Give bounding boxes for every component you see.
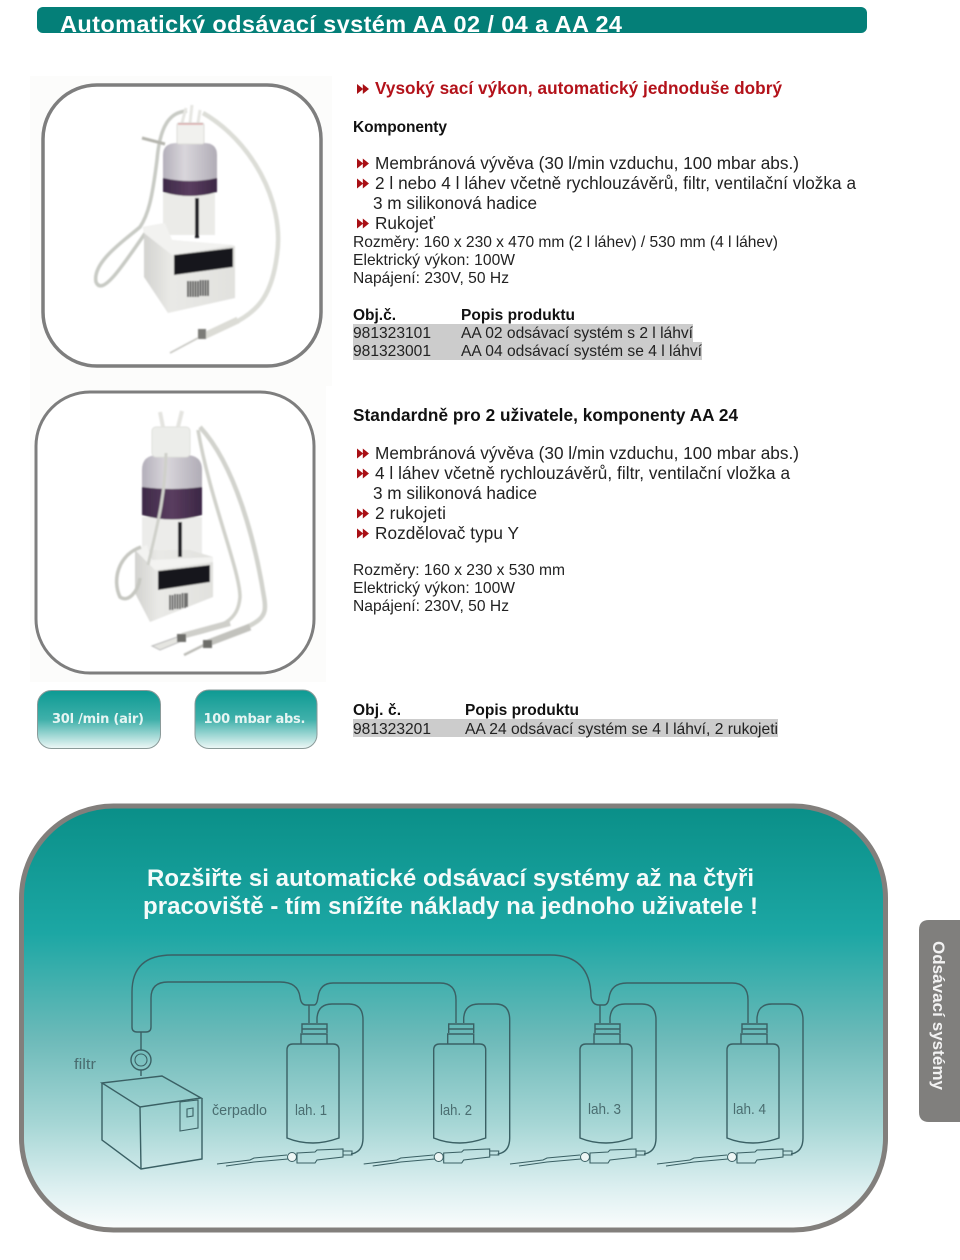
badge: 30 l/min <box>38 690 160 748</box>
order table AA 02/04: AA 04 odsávací systém se 4 l láhví <box>461 343 703 360</box>
component list: Rukojeť <box>375 213 436 233</box>
specifications AA 02/04: Elektrický výkon: 100W <box>353 252 515 269</box>
order table AA 02/04: Popis produktu <box>461 307 575 324</box>
heading: Komponenty: Komponenty <box>353 119 447 136</box>
title: Automatický odsávací systém AA 02 / 04 a AA 24 <box>60 11 622 37</box>
panel headline: Rozšiřte si automatické odsávací systémy až na čtyři <box>147 865 754 892</box>
specifications AA 24: Elektrický výkon: 100W <box>353 580 515 597</box>
specifications AA 24: Rozměry: 160 x 230 x 530 mm <box>353 562 565 579</box>
photo: AA 02/04 suction system <box>30 76 332 386</box>
panel headline <box>143 865 758 920</box>
icon: pump <box>102 1076 202 1169</box>
icon: filter <box>131 1050 151 1070</box>
badge: 30 l/min: 30l /min (air) <box>52 712 144 727</box>
component list AA 24: 2 rukojeti <box>375 503 446 523</box>
bottle 3 with handpiece <box>510 1004 656 1166</box>
component list AA 24: Membránová vývěva (30 l/min vzduchu, 100 mbar abs.) <box>375 443 799 463</box>
component list AA 24: Rozdělovač typu Y <box>375 523 520 543</box>
badge: 100 mbar <box>195 690 317 748</box>
component list AA 24: 3 m silikonová hadice <box>373 483 537 503</box>
label: pump: čerpadlo <box>212 1103 267 1119</box>
order table AA 02/04: 981323101 <box>353 325 431 342</box>
specifications AA 02/04: Rozměry: 160 x 230 x 470 mm (2 l láhev) / 530 mm (4 l láhev) <box>353 234 778 251</box>
label: bottle 4: lah. 4 <box>733 1102 766 1118</box>
order table AA 02/04: AA 02 odsávací systém s 2 l láhví <box>461 325 694 342</box>
label: bottle 2: lah. 2 <box>440 1103 472 1119</box>
order table AA 24: Obj. č. <box>353 702 401 719</box>
specifications AA 24: Napájení: 230V, 50 Hz <box>353 598 509 615</box>
photo: AA 24 suction system <box>30 386 326 682</box>
side tab: Odsávací systémy <box>929 941 948 1091</box>
component list: 3 m silikonová hadice <box>373 193 537 213</box>
order table AA 24: AA 24 odsávací systém se 4 l láhví, 2 rukojeti <box>465 721 778 738</box>
panel: expansion to four workstations <box>22 806 886 1230</box>
bottle 1 with handpiece <box>217 1004 363 1166</box>
label: bottle 1: lah. 1 <box>295 1103 327 1119</box>
component list: Membránová vývěva (30 l/min vzduchu, 100 mbar abs.) <box>375 153 799 173</box>
component list AA 24: 4 l láhev včetně rychlouzávěrů, filtr, ventilační vložka a <box>375 463 790 483</box>
label: bottle 3: lah. 3 <box>588 1102 621 1118</box>
heading: Standardně pro 2 uživatele: Standardně pro 2 uživatele, komponenty AA 24 <box>353 405 738 425</box>
schematic: vacuum pipes <box>132 955 748 1076</box>
side tab <box>919 920 960 1122</box>
specifications AA 02/04 <box>353 234 778 287</box>
specifications AA 24 <box>353 562 565 615</box>
order table AA 02/04: 981323001 <box>353 343 431 360</box>
panel headline: pracoviště - tím snížíte náklady na jednoho uživatele ! <box>143 893 758 920</box>
bottle 4 with handpiece <box>657 1004 803 1166</box>
order table AA 24: Popis produktu <box>465 702 579 719</box>
component list <box>357 153 856 233</box>
order table AA 02/04 <box>353 307 703 360</box>
order table AA 24 <box>353 702 778 738</box>
bottle 2 with handpiece <box>364 1004 510 1166</box>
specifications AA 02/04: Napájení: 230V, 50 Hz <box>353 270 509 287</box>
component list: 2 l nebo 4 l láhev včetně rychlouzávěrů, filtr, ventilační vložka a <box>375 173 856 193</box>
label: filter: filtr <box>74 1057 96 1073</box>
component list AA 24 <box>357 443 799 543</box>
title bar <box>37 7 867 37</box>
red headline with arrow: Vysoký sací výkon, automatický jednoduše dobrý <box>375 78 782 98</box>
order table AA 24: 981323201 <box>353 721 431 738</box>
badge: 100 mbar: 100 mbar abs. <box>204 712 306 727</box>
order table AA 02/04: Obj.č. <box>353 307 396 324</box>
